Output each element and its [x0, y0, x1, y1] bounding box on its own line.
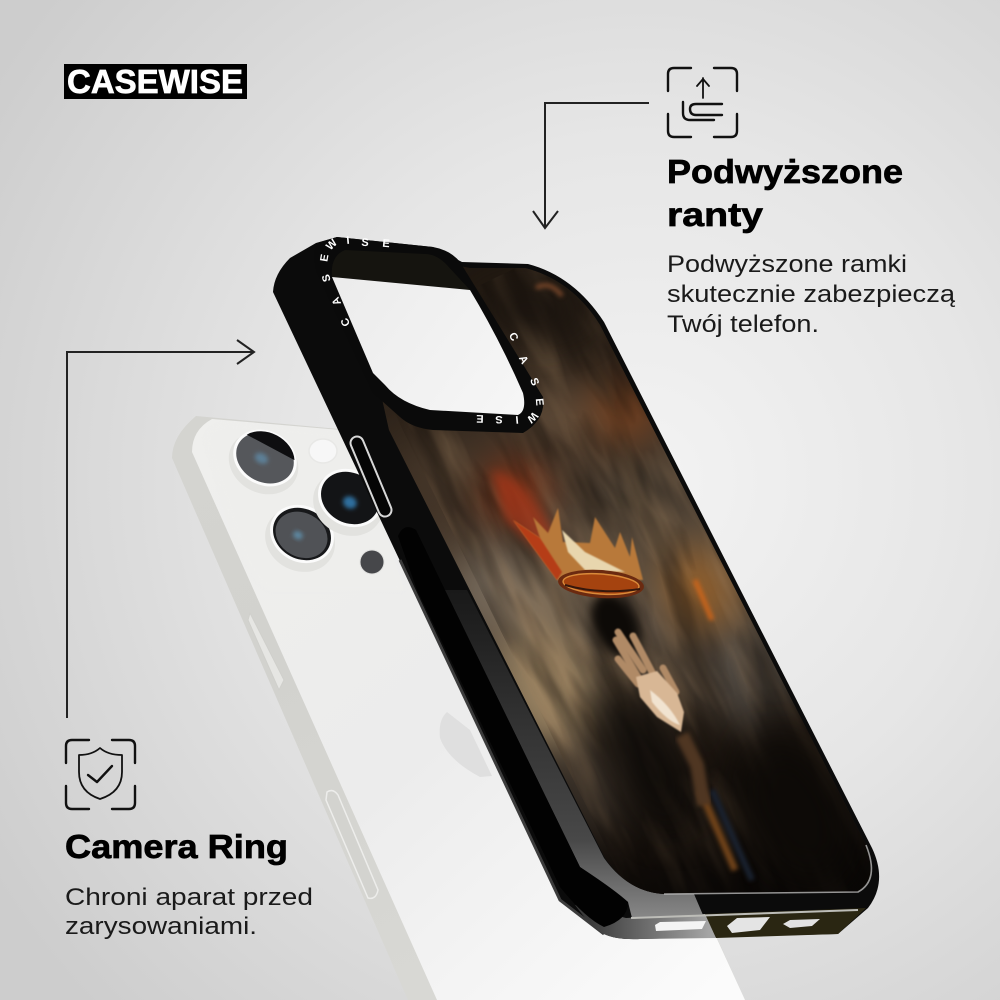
- phone rim: [172, 416, 745, 1000]
- flash: [309, 439, 337, 463]
- ring branding: S: [495, 413, 503, 425]
- text: raised edges description: Twój telefon.: [667, 311, 819, 338]
- heading: Podwyższone ranty: ranty: [667, 196, 764, 233]
- ring branding: E: [476, 412, 484, 424]
- lens 3: [302, 457, 396, 548]
- ring branding: A: [330, 295, 344, 307]
- ring branding: A: [516, 354, 530, 366]
- text: camera ring description: Chroni aparat przed: [65, 884, 313, 911]
- phone case: [273, 236, 880, 940]
- text: raised edges description: skutecznie zabezpieczą: [667, 281, 956, 308]
- camera ring: [314, 235, 545, 433]
- port: usb-c: [727, 917, 770, 933]
- volume pill button: [357, 443, 385, 510]
- white phone: [172, 416, 745, 1000]
- ring branding: [318, 235, 545, 425]
- ring branding: S: [527, 376, 541, 388]
- ring hole: see-through window: [332, 277, 524, 415]
- paint texture: light strokes: [426, 268, 865, 888]
- deep shadows: [496, 280, 842, 844]
- ring branding: S: [361, 237, 369, 249]
- sensor: [360, 550, 384, 574]
- ring branding: C: [506, 331, 520, 343]
- case body: [273, 237, 879, 939]
- arrow: left callout: [67, 340, 254, 718]
- ring branding: E: [533, 398, 545, 406]
- ring branding: E: [382, 238, 390, 250]
- ring branding: I: [346, 235, 350, 247]
- outer side band: [400, 560, 604, 934]
- artwork panel: [382, 266, 864, 894]
- heading: Podwyższone ranty: Podwyższone: [667, 153, 903, 190]
- fingers: [616, 632, 676, 692]
- port: microphone: [783, 919, 820, 928]
- art edge highlight right corner: [664, 845, 871, 894]
- side reflection band: [425, 545, 703, 918]
- ring branding: C: [339, 316, 353, 328]
- side slit: [398, 527, 628, 927]
- logo: CASEWISE: CASEWISE: [67, 63, 243, 100]
- ring branding: W: [324, 237, 340, 253]
- red smear behind crown: [490, 468, 552, 559]
- lens 2: [254, 493, 348, 584]
- icon: shield: [66, 740, 135, 809]
- hand illustration: [616, 632, 684, 732]
- ring branding: E: [318, 253, 331, 263]
- tonal shading top and bottom: [383, 267, 870, 894]
- dark shadow under crown: [584, 597, 645, 661]
- heading: Podwyższone ranty: [667, 153, 903, 233]
- text: raised edges description: Podwyższone ramki: [667, 251, 907, 278]
- ring hole: inner lip: [332, 250, 470, 290]
- arrow: top callout: [533, 103, 649, 228]
- forearm: [682, 735, 704, 805]
- icon: raised edges: [668, 68, 737, 137]
- text: camera ring description: [65, 884, 313, 940]
- crown illustration: [513, 508, 645, 601]
- camera plateau: [206, 424, 404, 590]
- heading: Camera Ring: Camera Ring: [65, 828, 288, 865]
- text: camera ring description: zarysowaniami.: [65, 913, 257, 940]
- port: speaker: [655, 921, 706, 931]
- text: raised edges description: [667, 251, 956, 338]
- paint texture: dark strokes: [413, 268, 788, 768]
- bottom edge strip: grey part: [575, 905, 716, 939]
- smoky paint clouds: [453, 366, 796, 841]
- accent strokes: [536, 285, 752, 880]
- palm: [636, 671, 684, 732]
- apple logo ghost: [440, 712, 492, 777]
- side button: lower: [326, 791, 378, 898]
- side button: upper: [248, 613, 284, 690]
- phone back face: [192, 419, 745, 1000]
- ring branding: S: [320, 273, 334, 283]
- palm highlight: [650, 690, 680, 725]
- ring branding: I: [515, 413, 519, 425]
- bottom edge strip: olive part: [703, 908, 866, 938]
- bottom highlight: [631, 910, 858, 918]
- ring branding: W: [524, 409, 540, 425]
- lens 1: [218, 418, 310, 506]
